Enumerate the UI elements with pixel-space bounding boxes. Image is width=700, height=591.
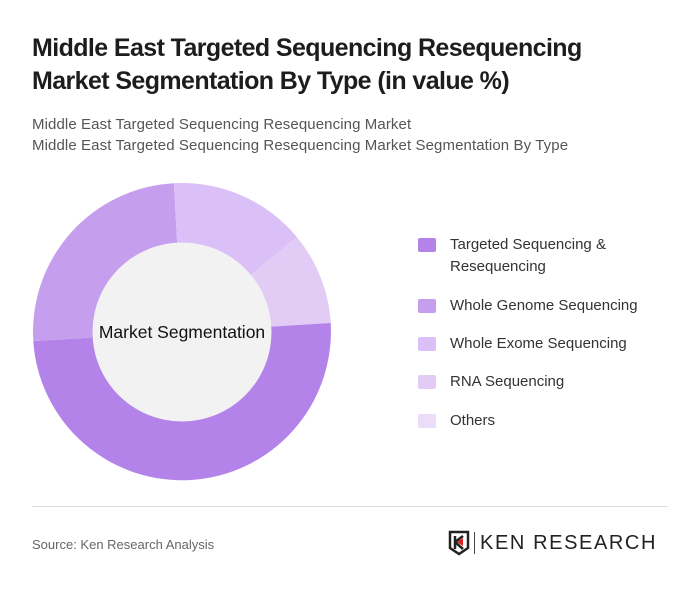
legend: others (418, 412, 495, 429)
segment: RNA (182, 237, 331, 332)
center label (92, 242, 272, 422)
legend: targeted (418, 236, 606, 275)
segment: targeted (33, 323, 331, 480)
donut chart (33, 183, 331, 480)
title (32, 34, 582, 95)
logo: KEN RESEARCH (480, 532, 657, 554)
subtitle: Middle East Targeted Sequencing Resequencing Market Segmentation By Type (32, 137, 568, 154)
subtitle (32, 116, 568, 154)
source: Source: Ken Research Analysis (32, 537, 214, 552)
subtitle: Middle East Targeted Sequencing Resequencing Market (32, 116, 411, 133)
legend: targeted: Resequencing (450, 258, 546, 275)
segment: whole genome (33, 183, 182, 341)
legend: whole genome: Whole Genome Sequencing (450, 297, 638, 314)
legend: others: Others (450, 412, 495, 429)
legend: RNA: RNA Sequencing (450, 373, 564, 390)
title: Middle East Targeted Sequencing Resequencing (32, 34, 582, 62)
title: Market Segmentation By Type (in value %) (32, 67, 509, 95)
segment: whole exome (174, 183, 297, 332)
legend: whole exome: Whole Exome Sequencing (450, 335, 627, 352)
center label: Market Segmentation (99, 322, 265, 342)
legend: targeted: Targeted Sequencing & (450, 236, 606, 253)
